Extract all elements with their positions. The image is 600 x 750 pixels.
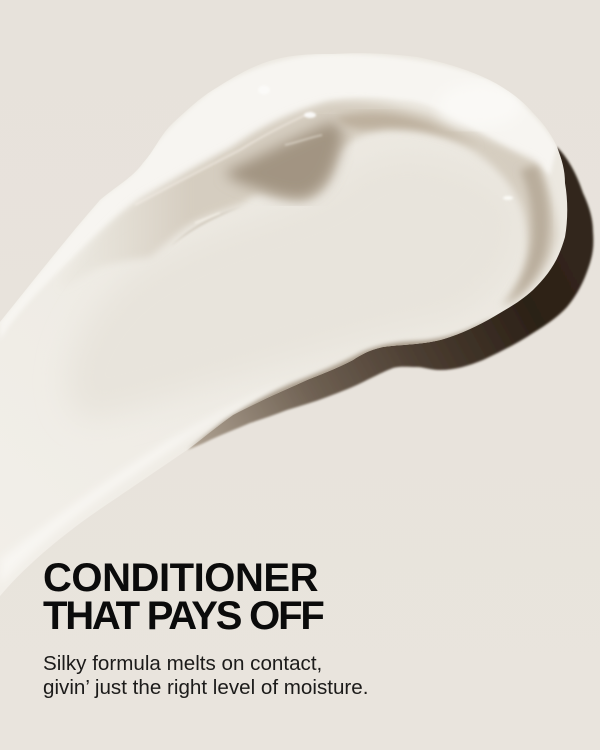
title — [43, 556, 324, 638]
ridge sparkle — [135, 86, 513, 205]
lower lip highlight — [4, 437, 182, 572]
cream body — [0, 53, 567, 596]
taupe inner band — [60, 102, 557, 307]
title: THAT PAYS OFF — [43, 594, 323, 638]
thin crease — [170, 206, 243, 247]
tan upper band — [338, 110, 465, 143]
top rim highlight — [0, 54, 557, 340]
lower edge taupe band — [187, 316, 495, 450]
cast shadow — [187, 147, 593, 450]
right rim shade — [505, 165, 549, 305]
shading clipped to the cream — [0, 54, 557, 585]
title: CONDITIONER — [43, 556, 318, 600]
description text: givin’ just the right level of moisture. — [43, 676, 368, 699]
white top right blob — [438, 83, 522, 127]
description text: Silky formula melts on contact, — [43, 652, 322, 675]
cream smear illustration — [0, 54, 596, 596]
basin tint — [80, 247, 336, 406]
dark taupe patch — [225, 122, 343, 198]
description text — [43, 652, 368, 699]
